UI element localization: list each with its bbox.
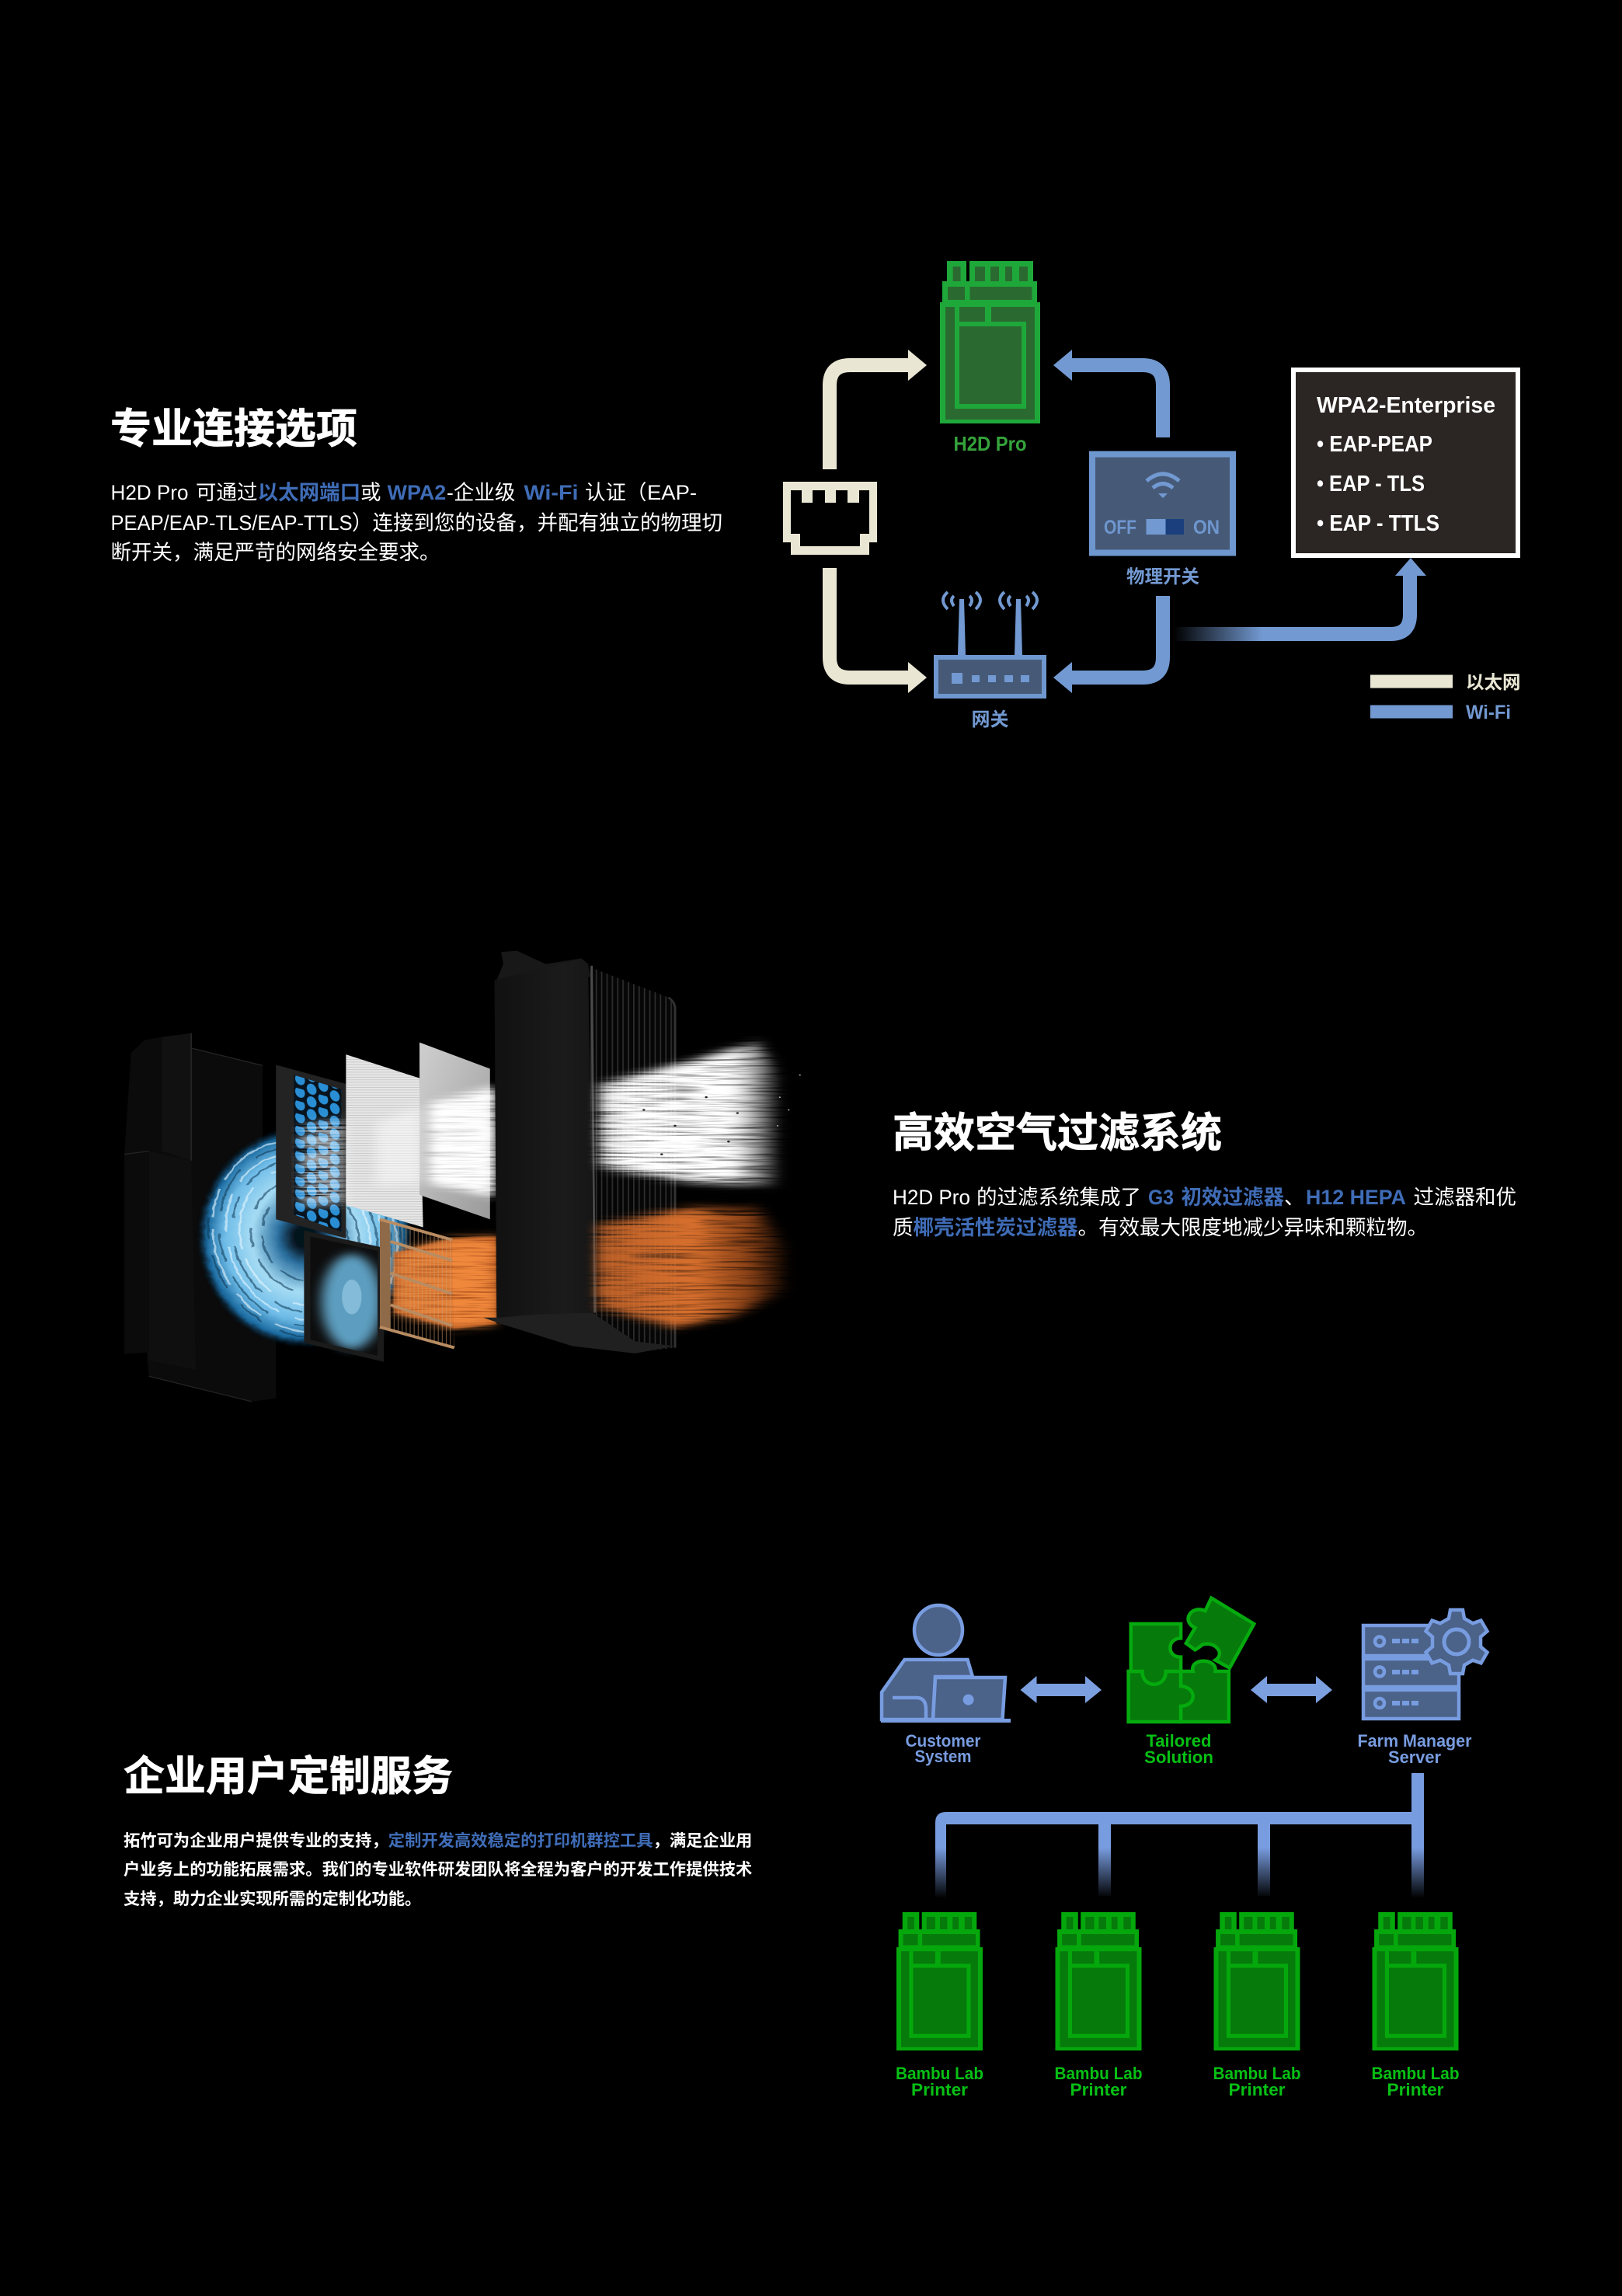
arrow: switch to gateway: [1053, 596, 1163, 693]
text block: filtration description: [893, 1186, 1516, 1239]
carbon filter: [276, 1065, 346, 1239]
label: customer system: System: [915, 1747, 971, 1766]
text block: filtration description: 、: [1284, 1186, 1305, 1209]
printer 3: Bambu Lab: [1213, 2064, 1300, 2083]
image: exploded air filter: [124, 951, 801, 1402]
text block: connection description: ）连接到您的设备，并配有独立的物理切: [352, 511, 722, 535]
text block: connection description: 认证（: [585, 481, 646, 504]
label: gateway: 网关: [971, 709, 1008, 730]
legend: 以太网: [1466, 672, 1521, 692]
label: tailored solution: [1144, 1731, 1213, 1767]
label: tailored solution: Tailored: [1147, 1731, 1212, 1751]
HEPA filter: [346, 1054, 423, 1227]
printer 3: [1213, 1912, 1300, 2099]
text block: filtration description: 质椰壳活性炭过滤器。有效最大限度地减少异味和颗粒物。: [893, 1216, 1428, 1239]
label: tailored solution: Solution: [1144, 1747, 1213, 1767]
printer 1: Printer: [911, 2080, 968, 2099]
label: farm manager server: Farm Manager: [1358, 1731, 1472, 1751]
network diagram: [783, 261, 1521, 730]
heading: custom services: 企业用户定制服务: [124, 1754, 453, 1800]
icon: gateway router: [936, 592, 1044, 696]
arrow: switch to printer: [1053, 350, 1163, 437]
arrow: ethernet to printer: [830, 350, 927, 469]
heading: air filtration: 高效空气过滤系统: [893, 1110, 1222, 1156]
panel: WPA2-Enterprise: • EAP - TTLS: [1317, 511, 1439, 536]
printer 2: Bambu Lab: [1055, 2064, 1142, 2083]
orange plume: [597, 1208, 791, 1327]
icon: customer with laptop: [882, 1605, 1010, 1722]
heading: connection options: 专业连接选项: [110, 406, 357, 452]
text block: services description: 拓竹可为企业用户提供专业的支持，定制开发高效稳定的打印机群控工具，满足企业用: [124, 1831, 752, 1850]
icon: wifi: [1147, 474, 1179, 498]
G3 filter sheet: [419, 1043, 490, 1219]
text block: connection description: 或: [360, 481, 381, 504]
text block: filtration description: 初效过滤器: [1181, 1186, 1285, 1209]
blue swirling air: [190, 1127, 419, 1347]
arrow: wi-fi to WPA2-Enterprise: [1174, 558, 1426, 634]
legend: Wi-Fi: [1466, 702, 1511, 723]
panel: WPA2-Enterprise: • EAP-PEAP: [1317, 432, 1432, 457]
text block: connection description: 断开关，满足严苛的网络安全要求。: [110, 541, 440, 564]
label: farm manager server: Server: [1388, 1747, 1441, 1767]
outer tower: [483, 951, 675, 1354]
text block: filtration description: 的过滤系统集成了: [976, 1186, 1141, 1209]
text block: connection description: 以太网端口: [258, 481, 360, 504]
panel: WPA2-Enterprise: WPA2-Enterprise: [1317, 393, 1495, 418]
text block: services description: 户业务上的功能拓展需求。我们的专业软件研发团队将全程为客户的开发工作提供技术: [124, 1859, 752, 1879]
printer 1: [896, 1912, 983, 2099]
text block: filtration description: H2D Pro: [893, 1186, 970, 1209]
label: OFF: OFF: [1104, 517, 1136, 538]
printer 1: Bambu Lab: [896, 2064, 983, 2083]
fan: [307, 1234, 382, 1359]
printer 4: Bambu Lab: [1372, 2064, 1459, 2083]
copper filter: [380, 1219, 454, 1347]
text block: connection description: [110, 481, 722, 564]
label: physical switch: 物理开关: [1126, 566, 1199, 587]
text block: connection description: EAP-: [647, 481, 697, 504]
icon: server with gear: [1363, 1610, 1487, 1719]
text block: connection description: -企业级: [447, 481, 515, 504]
printer 4: Printer: [1387, 2080, 1444, 2099]
label: farm manager server: [1358, 1731, 1472, 1767]
panel: enterprise custom services: [124, 1754, 752, 1908]
label: ON: ON: [1193, 517, 1220, 538]
panel: WPA2-Enterprise: • EAP - TLS: [1317, 472, 1425, 496]
legend: [1370, 672, 1521, 723]
text block: connection description: PEAP/EAP-TLS/EAP-TTLS: [110, 511, 353, 535]
text block: filtration description: 过滤器和优: [1414, 1186, 1516, 1209]
arrow: solution and server: [1251, 1676, 1332, 1703]
orange air stream: [394, 1237, 496, 1329]
panel: professional connection options: [110, 406, 722, 564]
white clean air plume: [599, 1042, 801, 1186]
arrow: customer and solution: [1021, 1676, 1102, 1703]
text block: services description: 支持，助力企业实现所需的定制化功能。: [124, 1889, 421, 1908]
text block: connection description: 可通过: [196, 481, 258, 504]
icon: physical switch: [1092, 454, 1233, 553]
panel: air filtration system: [893, 1110, 1516, 1239]
printer 2: Printer: [1070, 2080, 1127, 2099]
text block: connection description: H2D Pro: [110, 481, 188, 504]
printer 4: [1372, 1912, 1459, 2099]
label: customer system: [906, 1731, 981, 1766]
custom solution diagram: [882, 1598, 1487, 2099]
printer 3: Printer: [1229, 2080, 1286, 2099]
text block: filtration description: G3: [1148, 1186, 1174, 1209]
icon: puzzle: [1129, 1598, 1254, 1722]
text block: filtration description: H12 HEPA: [1306, 1186, 1406, 1209]
printer 2: [1055, 1912, 1142, 2099]
text block: connection description: Wi-Fi: [524, 481, 578, 504]
text block: connection description: WPA2: [388, 481, 446, 504]
icon: ethernet port: [783, 482, 877, 555]
arrow: ethernet to gateway: [830, 568, 927, 693]
label: H2D Pro: H2D Pro: [954, 432, 1027, 455]
white air stream inside filter: [301, 1088, 495, 1205]
text block: services description: [124, 1831, 752, 1908]
rear housing: [124, 1033, 276, 1402]
panel: WPA2-Enterprise: [1293, 370, 1518, 556]
icon: H2D Pro printer: [940, 261, 1040, 423]
toggle: [1147, 519, 1184, 535]
label: customer system: Customer: [906, 1731, 981, 1751]
network tree lines: [935, 1773, 1424, 1898]
